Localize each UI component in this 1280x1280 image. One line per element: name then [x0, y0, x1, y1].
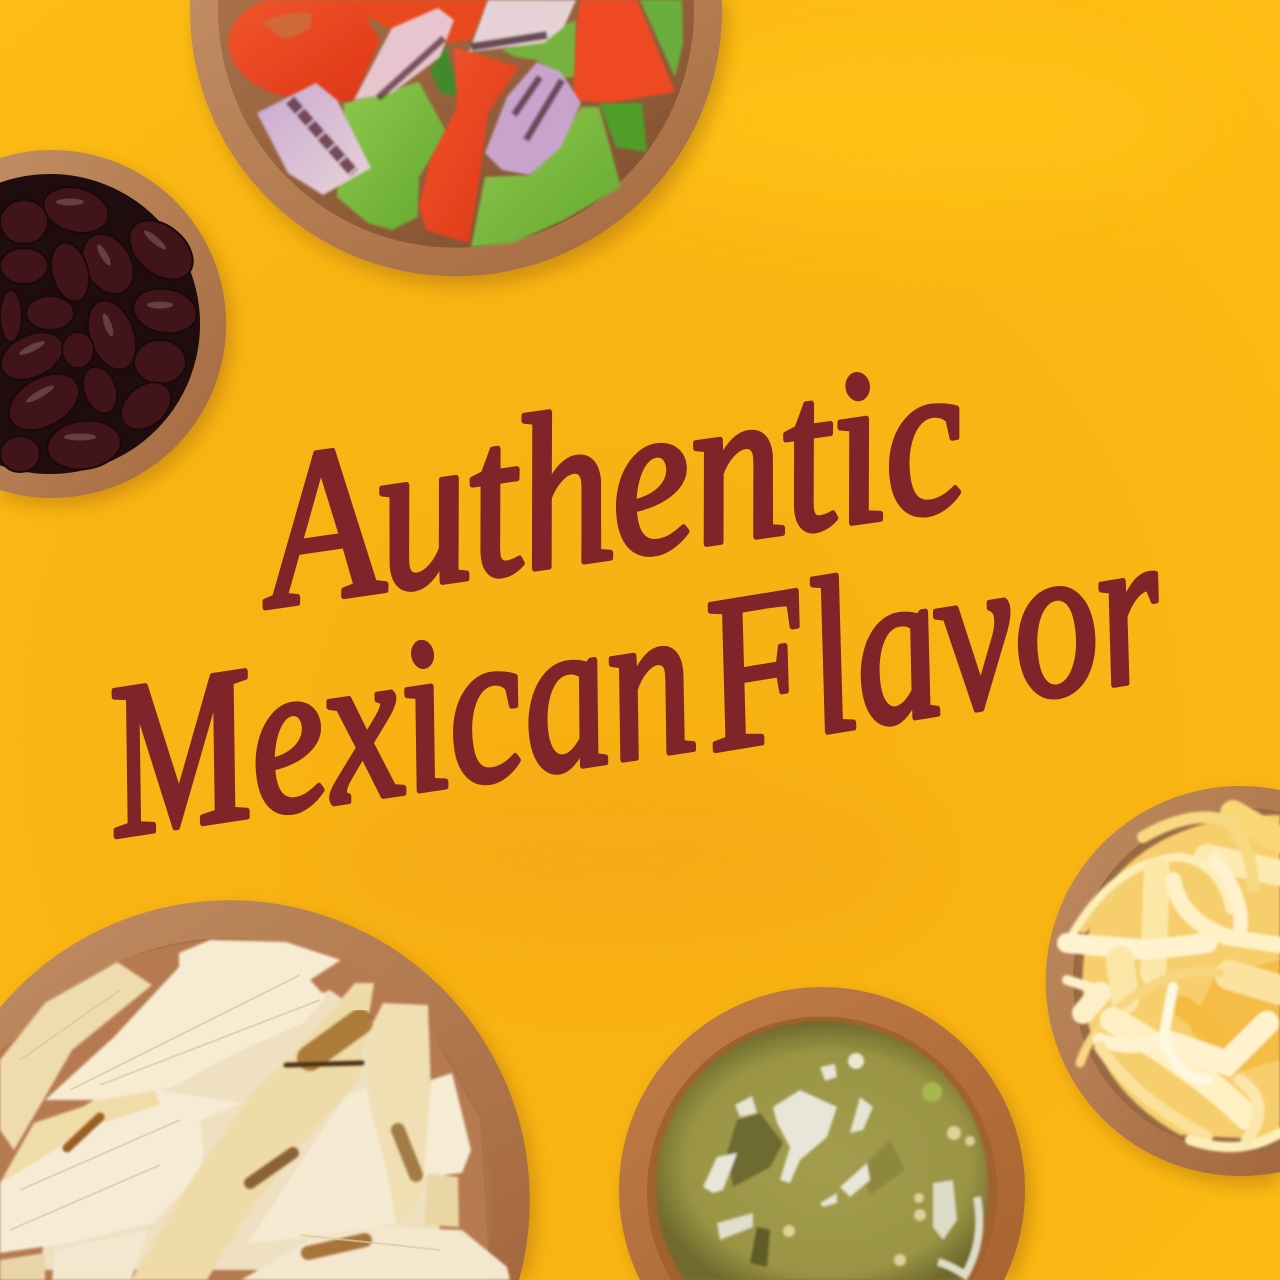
grill marks [67, 1022, 416, 1253]
bowl: black beans [0, 150, 232, 506]
cheese shreds [1067, 813, 1280, 1147]
bowl: grilled peppers and onions [190, 0, 728, 287]
headline line 2: Mexican: Mexican [86, 554, 709, 884]
headline line 1: Authentic [236, 311, 980, 655]
beans [0, 180, 204, 474]
bowl: shredded cheese [1046, 786, 1280, 1185]
green pepper pieces [313, 0, 683, 247]
bean highlights [18, 198, 173, 440]
headline [86, 311, 1181, 884]
chicken pieces [0, 940, 510, 1280]
bowl: salsa verde [619, 987, 1031, 1280]
salsa texture [703, 1053, 979, 1275]
bowl: grilled chicken [0, 900, 536, 1280]
red onion pieces [257, 0, 581, 195]
red pepper pieces [228, 0, 675, 243]
meat fibres [10, 975, 440, 1250]
